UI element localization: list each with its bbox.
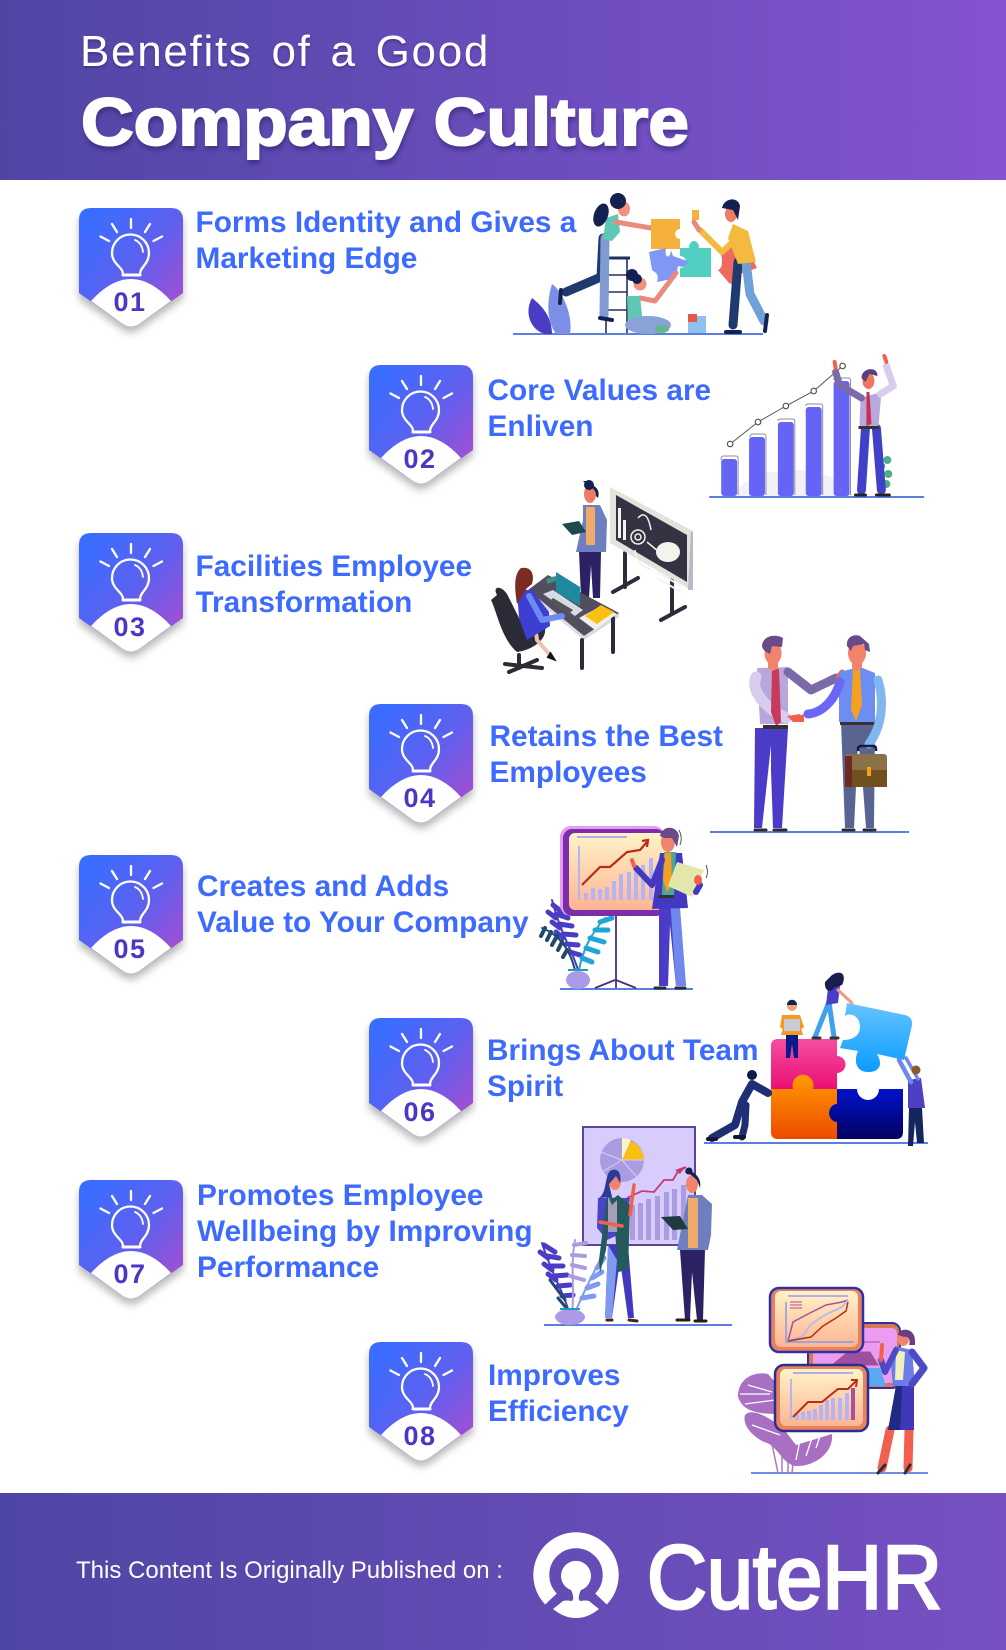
benefit 03 badge (79, 533, 183, 652)
benefit 02 badge: 02 (403, 444, 437, 474)
illustration: growth bar chart (709, 356, 924, 498)
benefit 05 text: Value to Your Company (197, 906, 529, 939)
illustration: office worker and presentation board (491, 480, 693, 672)
benefit 08 text: Improves (488, 1359, 620, 1392)
footer attribution text: This Content Is Originally Published on : (76, 1557, 503, 1584)
benefit 04 badge (369, 704, 473, 822)
benefit 06 text: Spirit (487, 1070, 563, 1103)
benefit 04 text: Employees (490, 756, 647, 789)
illustration: handshake between two men (710, 635, 909, 833)
benefit 06 badge (369, 1018, 473, 1136)
benefit 05 badge (79, 855, 183, 974)
illustration: team building giant puzzle (704, 973, 928, 1146)
benefit 02 text: Core Values are (488, 374, 711, 407)
header band (0, 0, 1006, 180)
benefit 01 text: Marketing Edge (196, 242, 417, 275)
benefit 07 text: Wellbeing by Improving (197, 1215, 533, 1248)
benefit 01 badge: 01 (113, 287, 147, 317)
benefit 07 text: Performance (197, 1251, 379, 1284)
benefit 03 badge: 03 (113, 612, 147, 642)
illustration: presenter with rising chart (541, 826, 708, 990)
benefit 07 text: Promotes Employee (197, 1179, 483, 1212)
benefit 07 badge: 07 (113, 1259, 147, 1289)
benefit 01 badge (79, 208, 183, 326)
benefit 05 badge: 05 (113, 934, 147, 964)
benefit 08 badge: 08 (403, 1421, 437, 1451)
benefit 05 text: Creates and Adds (197, 870, 449, 903)
benefit 03 text: Facilities Employee (196, 550, 472, 583)
benefit 01 text: Forms Identity and Gives a (196, 206, 577, 239)
CuteHR wordmark: CuteHR (647, 1528, 942, 1628)
CuteHR logo mark (541, 1540, 611, 1618)
benefit 04 badge: 04 (403, 783, 437, 813)
benefit 03 text: Transformation (196, 586, 412, 619)
benefit 06 text: Brings About Team (487, 1034, 758, 1067)
benefit 02 text: Enliven (488, 410, 593, 443)
footer band (0, 1493, 1006, 1650)
benefit 07 badge (79, 1180, 183, 1298)
benefit 02 badge (369, 365, 473, 484)
benefit 04 text: Retains the Best (490, 720, 723, 753)
benefit 08 text: Efficiency (488, 1395, 629, 1428)
illustration: two colleagues at chart board (540, 1127, 732, 1326)
illustration: woman presenting charts with monstera (738, 1288, 928, 1474)
title line one: Benefits of a Good (80, 27, 490, 76)
illustration: team assembling puzzle (513, 193, 767, 335)
title line two: Company Culture (81, 85, 689, 160)
benefit 08 badge (369, 1342, 473, 1460)
benefit 06 badge: 06 (403, 1097, 437, 1127)
